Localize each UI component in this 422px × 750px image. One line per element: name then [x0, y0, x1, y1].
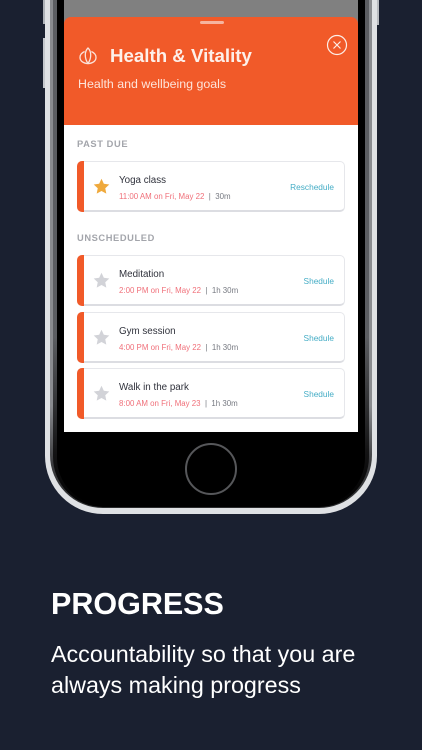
panel subtitle: Health and wellbeing goals	[78, 77, 226, 91]
action link: Reschedule	[290, 182, 334, 192]
phone body	[45, 0, 377, 514]
main heading: PROGRESS	[51, 587, 224, 621]
action link: Shedule	[304, 276, 334, 286]
phone side buttons	[43, 0, 379, 88]
heading: unscheduled: UNSCHEDULED	[77, 233, 155, 243]
drag handle	[200, 21, 224, 24]
task name: Meditation	[119, 268, 164, 280]
phone mid band	[50, 0, 372, 508]
icon: gold star	[94, 178, 110, 194]
home button	[185, 443, 237, 495]
heading: past due: PAST DUE	[77, 139, 128, 149]
icon: lotus	[79, 47, 97, 64]
icon: grey star	[94, 330, 109, 344]
task name: Walk in the park	[119, 382, 189, 392]
task time: 2:00 PM on Fri, May 22 | 1h 30m	[119, 286, 238, 294]
card: gym session	[77, 312, 345, 363]
card: meditation	[77, 255, 345, 306]
dimmed app background	[64, 0, 358, 30]
phone frame	[43, 0, 379, 514]
screen sheet	[64, 125, 358, 432]
card: yoga class	[77, 161, 345, 212]
description	[51, 641, 355, 698]
phone inner band	[53, 0, 369, 507]
task time: 4:00 PM on Fri, May 22 | 1h 30m	[119, 342, 238, 352]
task time: 8:00 AM on Fri, May 23 | 1h 30m	[119, 398, 238, 408]
header panel	[64, 17, 358, 125]
task time: 11:00 AM on Fri, May 22 | 30m	[119, 192, 231, 200]
description: Accountability so that you are	[51, 641, 355, 667]
action link: Shedule	[304, 389, 334, 399]
icon: close	[326, 34, 348, 56]
panel title: Health & Vitality	[110, 45, 252, 66]
action link: Shedule	[304, 333, 334, 343]
description: always making progress	[51, 672, 301, 698]
task name: Gym session	[119, 326, 176, 336]
icon: grey star	[94, 386, 109, 400]
card: walk in the park	[77, 368, 345, 419]
task name: Yoga class	[119, 174, 166, 186]
icon: grey star	[94, 273, 109, 288]
phone bezel	[57, 0, 365, 505]
